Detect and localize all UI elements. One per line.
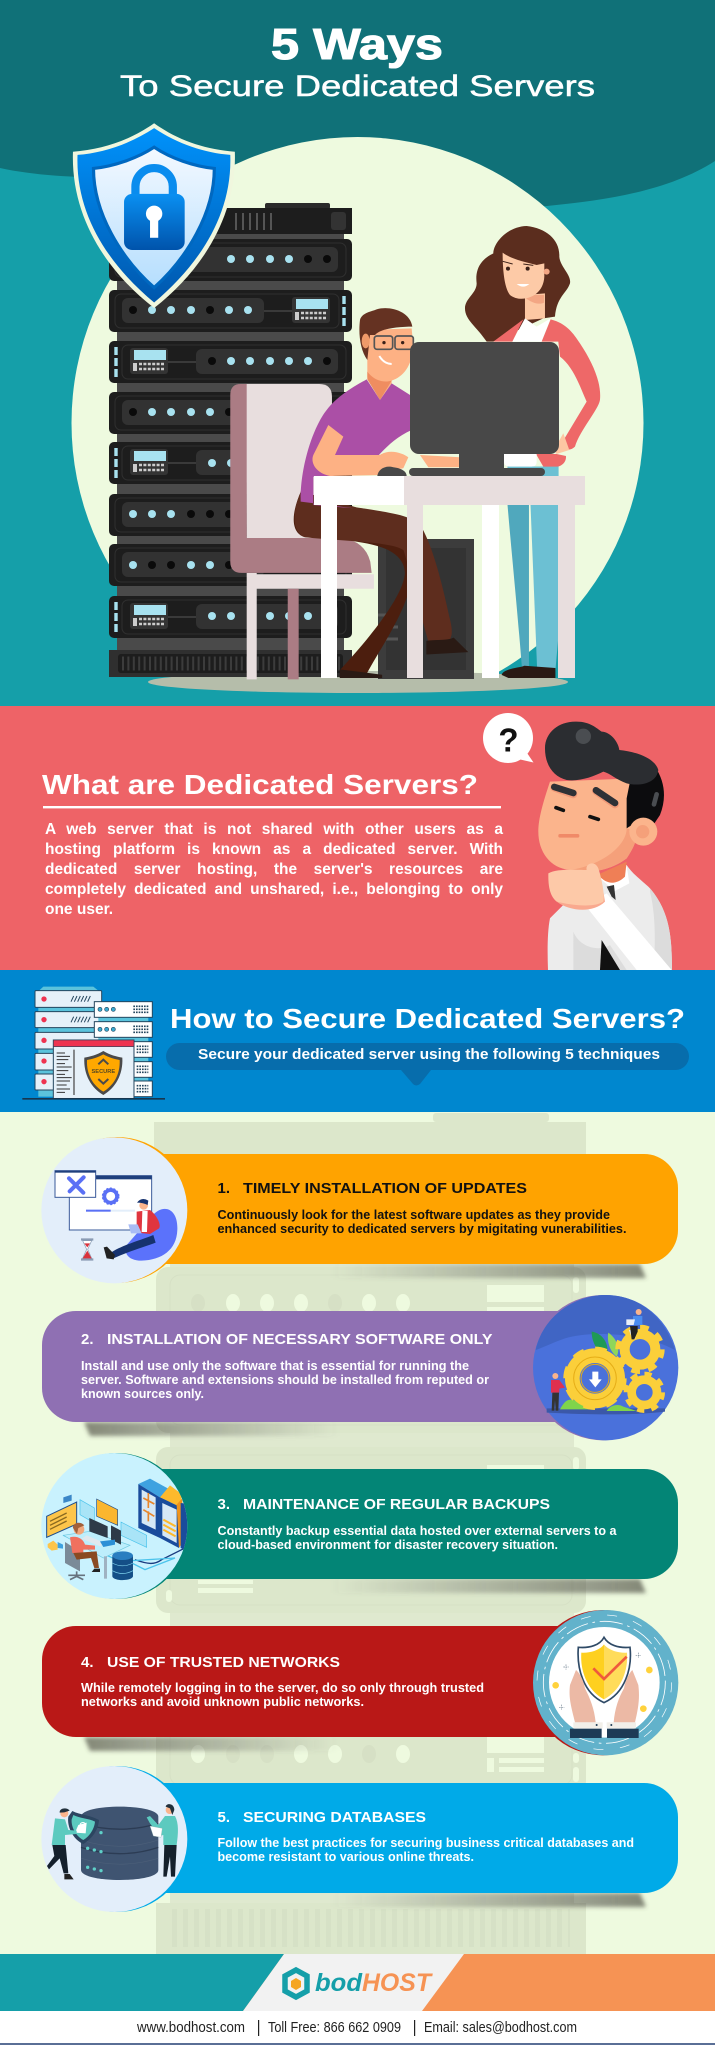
footer contact strip: www.bodhost.com <box>136 2020 245 2036</box>
illustration: monitor <box>409 342 559 476</box>
text block: dedicated server definition: dedicated server hosting, the server's resources are <box>45 861 503 878</box>
pale circle backdrop <box>72 137 644 709</box>
card 1 heading: TIMELY INSTALLATION OF UPDATES <box>243 1180 527 1197</box>
card 5 text: Follow the best practices for securing business critical databases and <box>218 1836 634 1850</box>
card 2 text: known sources only. <box>81 1387 204 1401</box>
text block: dedicated server definition: one user. <box>45 901 113 918</box>
logo: bodHOST: bod <box>315 1969 363 1997</box>
card 1 text: enhanced security to dedicated servers by migitating vunerabilities. <box>218 1222 626 1236</box>
icon: trusted shield in hands <box>530 1610 678 1755</box>
icon: security shield with padlock <box>73 123 235 308</box>
illustration: woman upper body <box>465 226 600 477</box>
title: 5 Ways <box>271 20 443 69</box>
panel: how to secure <box>0 970 715 1112</box>
text block: dedicated server definition: A web server that is not shared with other users as a <box>45 821 503 838</box>
illustration: thinking man <box>538 722 672 970</box>
dark teal top wave <box>0 0 715 207</box>
heading: how to secure dedicated servers: How to Secure Dedicated Servers? <box>170 1003 685 1034</box>
card 1: timely installation of updates <box>162 1154 678 1264</box>
card 2 heading: INSTALLATION OF NECESSARY SOFTWARE ONLY <box>107 1331 492 1348</box>
text block: dedicated server definition: hosting platform is known as a dedicated server. With <box>45 841 503 858</box>
logo: bodHOST: HOST <box>362 1969 434 1997</box>
card 1 text: Continuously look for the latest software updates as they provide <box>218 1208 610 1222</box>
icon: secure server stack: SECURE <box>92 1069 115 1075</box>
footer band with logo <box>0 1954 715 2011</box>
icon: backups illustration <box>41 1453 195 1599</box>
callout: techniques pill <box>166 1043 689 1086</box>
panel: what are dedicated servers <box>0 706 715 970</box>
footer contact strip: Email: sales@bodhost.com <box>424 2020 577 2036</box>
card 4: use of trusted networks <box>42 1626 582 1737</box>
icon: secure server stack <box>22 987 165 1100</box>
card 2: installation of necessary software only <box>42 1311 582 1422</box>
card 4 heading: 4. <box>81 1654 94 1671</box>
icon: question speech bubble <box>483 713 534 763</box>
card 5 heading: SECURING DATABASES <box>243 1809 426 1826</box>
footer contact strip <box>0 2011 715 2048</box>
illustration: man trousers and shoes <box>294 491 468 678</box>
shadows under cards <box>84 1264 646 1907</box>
floor shadow <box>148 671 568 693</box>
illustration: computer tower <box>378 539 474 679</box>
card 4 text: While remotely logging in to the server, do so only through trusted <box>81 1681 484 1695</box>
icon: updates illustration <box>41 1137 190 1283</box>
card 4 heading: USE OF TRUSTED NETWORKS <box>107 1654 340 1671</box>
icon: software gears illustration <box>530 1295 678 1440</box>
card 5 heading: 5. <box>218 1809 230 1826</box>
card 4 text <box>81 1681 484 1709</box>
card 2 text: server. Software and extensions should be installed from reputed or <box>81 1373 489 1387</box>
illustration: chair <box>230 384 374 679</box>
text block: dedicated server definition <box>45 821 504 918</box>
card 1 text <box>218 1208 626 1236</box>
logo: bodHOST <box>285 1969 434 1997</box>
card 3 heading: MAINTENANCE OF REGULAR BACKUPS <box>243 1496 550 1513</box>
card 1 heading: 1. <box>218 1180 230 1197</box>
card 5: securing databases <box>162 1783 678 1893</box>
card 3 heading: 3. <box>218 1496 230 1513</box>
text block: dedicated server definition: completely dedicated and unshared, i.e., belonging to only <box>45 881 503 898</box>
card 4 text: networks and avoid unknown public networks. <box>81 1695 364 1709</box>
card 3 text <box>218 1524 618 1552</box>
illustration: desk <box>314 476 585 678</box>
callout: techniques pill: Secure your dedicated server using the following 5 techniques <box>198 1046 660 1063</box>
panel: steps background with ghost server rack <box>0 1112 715 1954</box>
card 2 heading: 2. <box>81 1331 94 1348</box>
illustration: man upper body <box>301 308 460 508</box>
icon: database security illustration <box>41 1766 190 1912</box>
card 3: maintenance of regular backups <box>162 1469 678 1579</box>
card 2 text: Install and use only the software that is essential for running the <box>81 1359 469 1373</box>
illustration: server rack <box>109 203 352 677</box>
title: To Secure Dedicated Servers <box>120 70 595 103</box>
card 3 text: cloud-based environment for disaster recovery situation. <box>218 1538 558 1552</box>
card 3 text: Constantly backup essential data hosted over external servers to a <box>218 1524 618 1538</box>
illustration: woman trousers and shoes <box>502 466 559 678</box>
title <box>120 20 595 103</box>
icon: question speech bubble: ? <box>498 722 519 758</box>
panel: hero background <box>0 0 715 709</box>
footer contact strip: Toll Free: 866 662 0909 <box>268 2020 401 2036</box>
card 2 text <box>81 1359 489 1401</box>
card 5 text: become resistant to various online threats. <box>218 1850 474 1864</box>
card 5 text <box>218 1836 634 1864</box>
heading: what are dedicated servers: What are Dedicated Servers? <box>42 769 478 800</box>
